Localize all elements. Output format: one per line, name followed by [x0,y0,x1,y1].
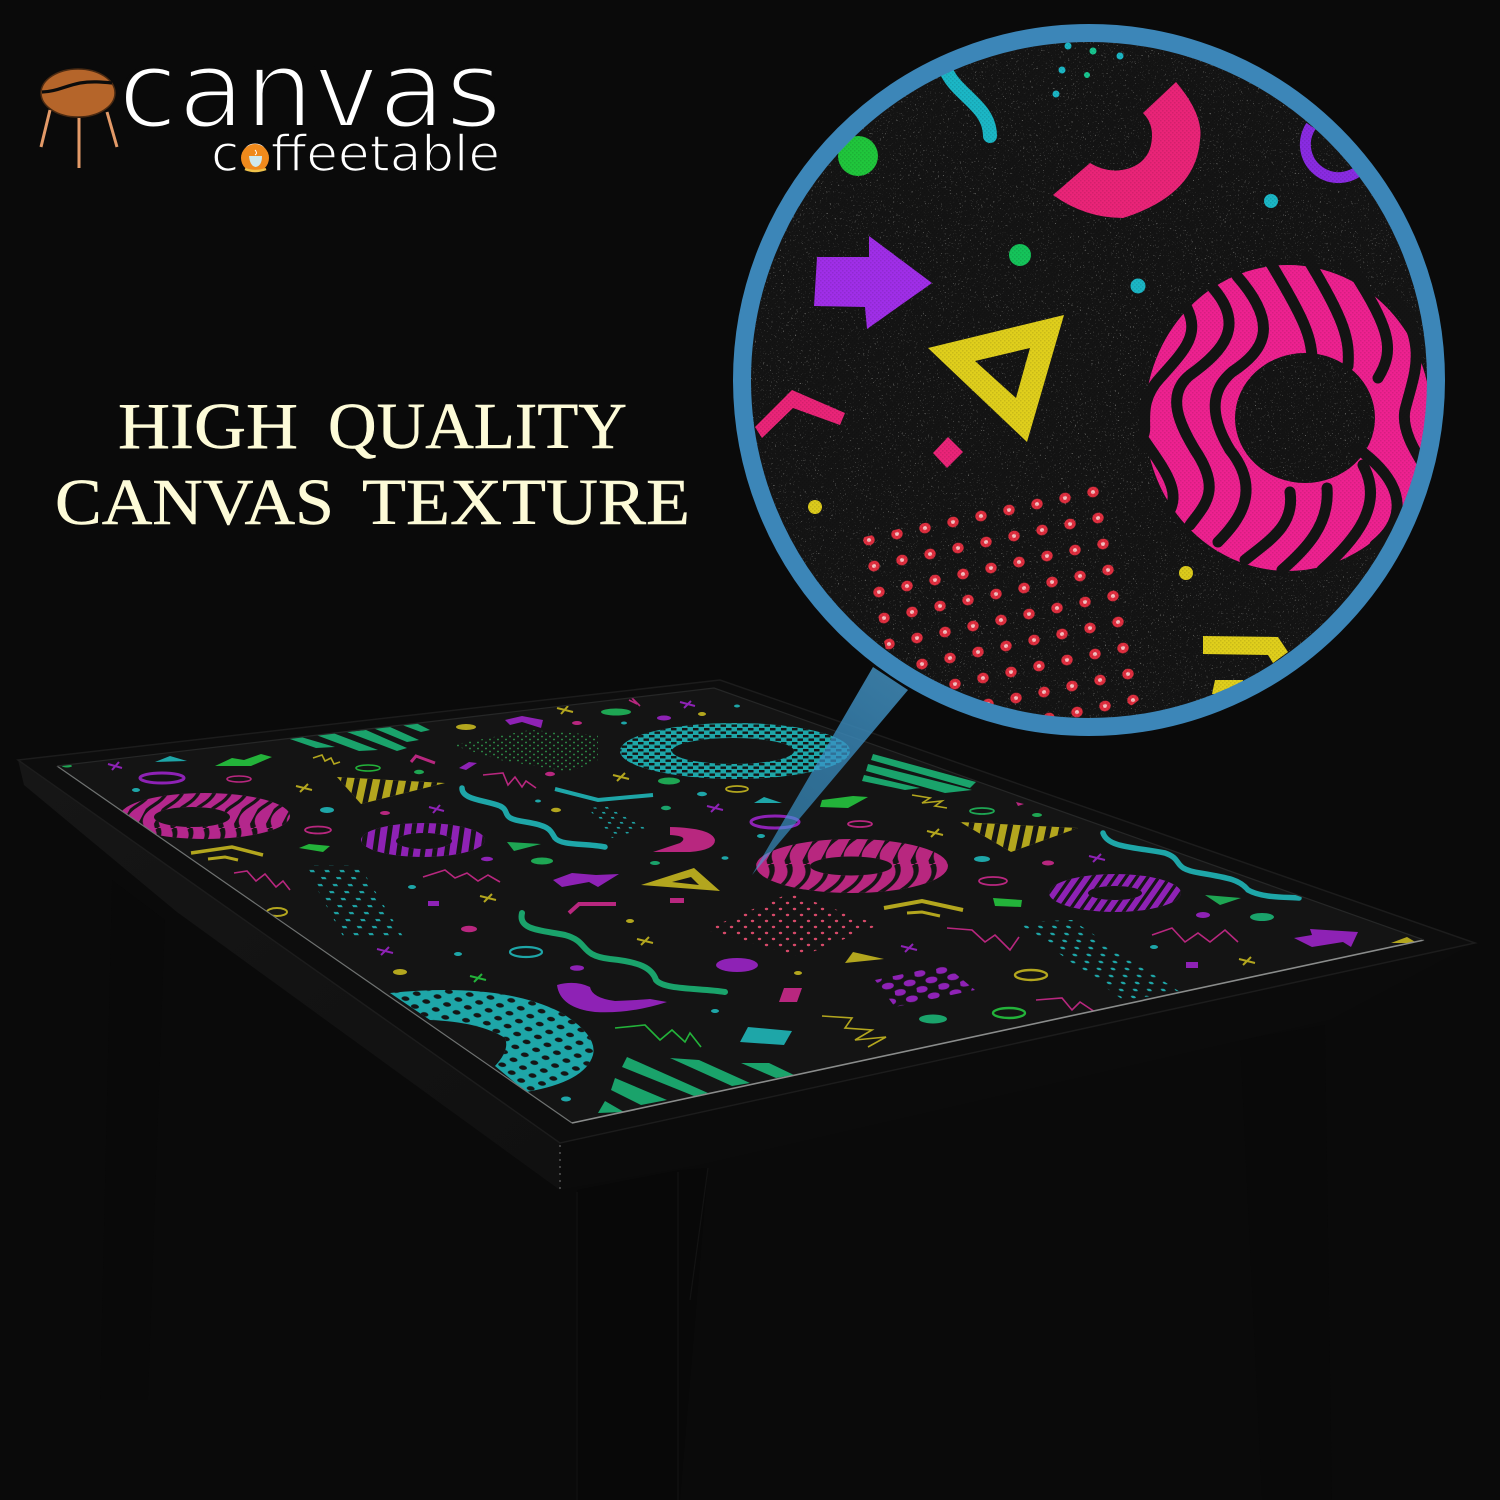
heading line 1: HIGH [118,390,298,463]
table legs [100,880,1332,1500]
icon: green circle [838,136,878,176]
callout pointer [752,667,908,875]
purple striped donut, left [361,823,485,857]
heading line 1 [118,390,627,463]
teal dotted half donut, bottom [390,990,594,1092]
icon: small dots cluster [808,42,1278,580]
small dots and ellipses [62,704,1274,1102]
purple striped donut, right [1049,874,1181,912]
logo [41,28,502,183]
red dot field [863,486,1139,718]
icon: teal squiggle [945,68,990,136]
icon: magenta diamond [933,437,963,468]
icon: purple arc [1305,126,1366,178]
yellow chevrons [1203,636,1288,694]
dot fields [304,730,1180,1007]
chevrons [191,756,963,916]
heading line 2: TEXTURE [362,466,690,539]
canvas speckle texture [735,25,1445,735]
yellow striped triangles [337,777,1078,852]
magnified canvas circle [735,25,1445,735]
icon: coffee cup [241,144,269,172]
magenta half moon [653,827,715,852]
icon: magenta half moon [1053,82,1200,218]
table top printed surface [57,688,1424,1123]
rings [140,765,1047,1018]
wavy lines [462,788,1299,992]
heading line 1: QUALITY [328,390,627,463]
zigzags [234,698,1238,1047]
table frame [18,680,1475,1190]
plus marks [108,701,1255,982]
magenta wavy donut, left [120,793,290,839]
purple half moon [557,983,667,1012]
triangle and square shapes [155,716,1417,1045]
logo wordmark: canvas: canvas [118,28,502,153]
logo wordmark: coffeetable: coffeetable [211,125,500,183]
heading line 2: CANVAS [55,466,334,539]
green stripe triangles [287,723,976,1113]
icon: magenta chevron [755,390,845,438]
icon: yellow triangle [928,315,1064,442]
teal dotted donut, top [620,723,850,779]
magenta wavy donut, centre [756,839,948,893]
glass edge highlights [57,766,572,1123]
big magenta wave donut [1142,258,1432,571]
heading [55,390,690,539]
heading line 2 [55,466,690,539]
arrows [215,754,1358,947]
icon: purple arrow [814,236,932,329]
canvas weave overlay [735,25,1445,735]
blue ring border [742,33,1436,727]
icon: coffee bean table [41,69,117,168]
